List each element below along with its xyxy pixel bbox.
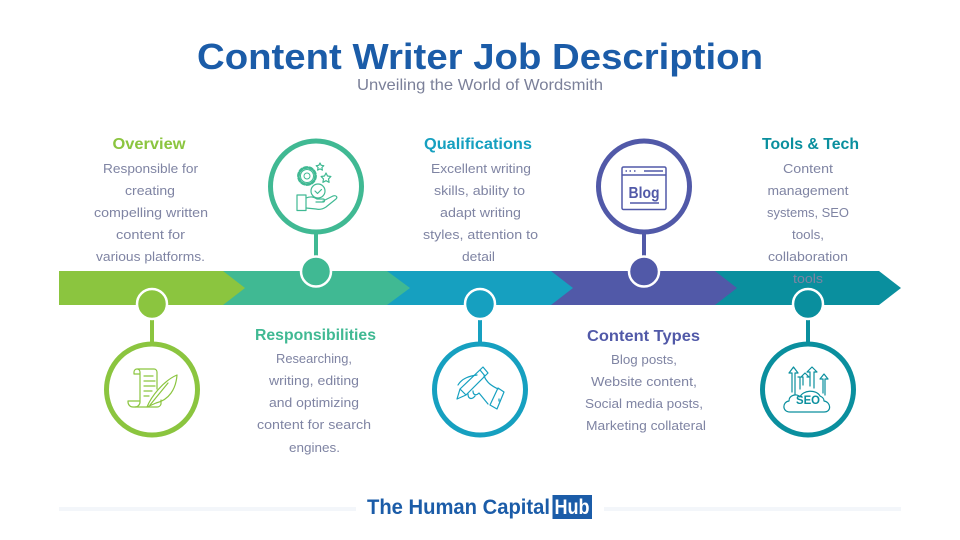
arrow segment: tools and tech xyxy=(715,271,901,305)
text block: responsibilities xyxy=(257,351,371,455)
heading: responsibilities: Responsibilities xyxy=(255,327,376,344)
icon: scroll and quill xyxy=(128,369,177,407)
text block: qualifications: adapt writing xyxy=(440,205,521,220)
text block: qualifications: skills, ability to xyxy=(434,183,525,198)
panel: content types xyxy=(585,141,706,433)
icon: blog window: Blog xyxy=(628,185,660,202)
text block: responsibilities: engines. xyxy=(289,440,340,455)
text block: responsibilities: Researching, xyxy=(276,351,352,366)
text block: content types: Blog posts, xyxy=(611,352,677,367)
text block: responsibilities: writing, editing xyxy=(268,373,359,388)
text block: overview: content for xyxy=(116,227,186,242)
text block: content types: Website content, xyxy=(591,374,697,389)
logo: The Human Capital xyxy=(367,496,550,519)
text block: overview: compelling written xyxy=(94,205,208,220)
footer rule right xyxy=(604,507,901,511)
text block: overview: various platforms. xyxy=(96,249,205,264)
text block: overview xyxy=(94,161,208,264)
icon: hand writing with pen xyxy=(457,367,504,409)
text block: tools and tech: collaboration xyxy=(768,249,848,264)
text block: tools and tech: Content xyxy=(783,161,833,176)
icon: hand with gear and stars xyxy=(297,163,337,210)
text block: tools and tech: management xyxy=(768,183,849,198)
connector node: overview xyxy=(106,289,198,435)
arrow segment: qualifications xyxy=(387,271,573,305)
text block: content types xyxy=(585,352,706,433)
text block: qualifications: styles, attention to xyxy=(423,227,538,242)
connector node: qualifications xyxy=(434,289,526,435)
text block: responsibilities: and optimizing xyxy=(269,395,359,410)
logo: Hub xyxy=(554,496,590,519)
connector node: responsibilities xyxy=(270,141,362,286)
icon: blog window xyxy=(622,167,666,210)
footer rule left xyxy=(59,507,356,511)
heading: tools and tech: Tools & Tech xyxy=(762,136,859,153)
arrow segment: responsibilities xyxy=(223,271,410,305)
title: Content Writer Job Description xyxy=(197,36,763,77)
text block: content types: Social media posts, xyxy=(585,396,703,411)
heading: content types: Content Types xyxy=(587,328,700,345)
text block: tools and tech: systems, SEO xyxy=(767,205,849,220)
arrow segment: overview xyxy=(59,271,245,305)
arrow segment: content types xyxy=(551,271,737,305)
icon: SEO cloud with arrows xyxy=(784,367,830,412)
text block: tools and tech: tools, xyxy=(792,227,824,242)
text block: overview: creating xyxy=(125,183,175,198)
panel: tools and tech xyxy=(762,136,859,435)
connector node: content types xyxy=(598,141,690,286)
text block: tools and tech xyxy=(767,161,849,286)
subtitle: Unveiling the World of Wordsmith xyxy=(357,77,603,94)
text block: qualifications: detail xyxy=(462,249,495,264)
panel: responsibilities xyxy=(255,141,376,455)
heading: qualifications: Qualifications xyxy=(424,136,532,153)
heading: overview: Overview xyxy=(112,136,186,153)
panel: qualifications xyxy=(423,136,538,435)
text block: content types: Marketing collateral xyxy=(586,418,706,433)
text block: overview: Responsible for xyxy=(103,161,199,176)
text block: responsibilities: content for search xyxy=(257,417,371,432)
text block: tools and tech: tools xyxy=(793,271,824,286)
text block: qualifications xyxy=(423,161,538,264)
icon: SEO cloud with arrows: SEO xyxy=(796,393,820,407)
text block: qualifications: Excellent writing xyxy=(431,161,531,176)
timeline arrow xyxy=(59,271,901,305)
panel: overview xyxy=(94,136,208,435)
connector node: tools and tech xyxy=(762,289,854,435)
